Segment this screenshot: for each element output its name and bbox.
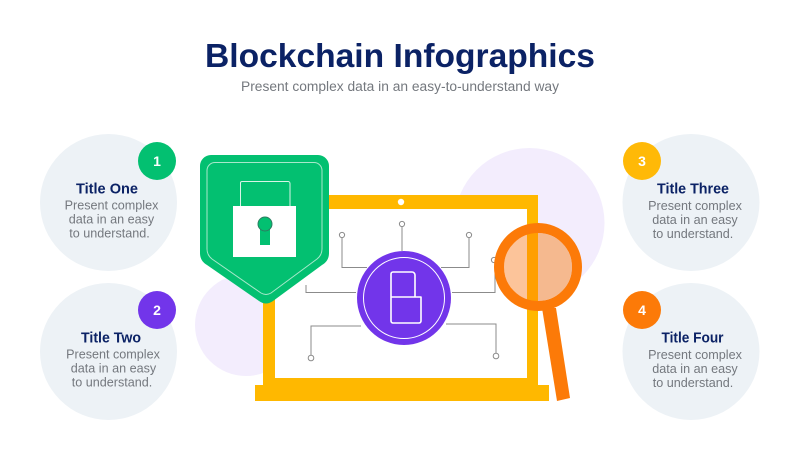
- panel: title two: Present complex: [66, 348, 161, 362]
- panel: title two: to understand.: [72, 376, 152, 390]
- panel: title four: 4: [638, 302, 646, 318]
- laptop: [255, 195, 549, 401]
- title: Blockchain Infographics: [205, 37, 595, 74]
- icon: magnifying glass: [499, 228, 577, 401]
- panel: title two: data in an easy: [71, 362, 157, 376]
- panel: title one: to understand.: [69, 226, 150, 240]
- panel: title one: 1: [153, 153, 161, 169]
- panel: title three: [622, 134, 760, 271]
- icon: blockchain coin: [357, 251, 451, 345]
- panel: title one: Present complex: [65, 198, 159, 212]
- panel: title four: to understand.: [653, 376, 733, 390]
- panel: title two: [40, 283, 177, 420]
- panel: title four: Present complex: [648, 348, 743, 362]
- panel: title one: Title One: [76, 180, 138, 198]
- panel: title two: 2: [153, 302, 161, 318]
- background circle: right: [454, 148, 604, 298]
- panel: title three: to understand.: [653, 227, 733, 241]
- panel: title three: data in an easy: [652, 213, 738, 227]
- panel: title one: data in an easy: [69, 212, 155, 226]
- subtitle: Present complex data in an easy-to-understand way: [241, 79, 559, 94]
- panel: title one: [40, 134, 177, 271]
- panel: title two: Title Two: [81, 330, 141, 346]
- icon: shield with padlock: [200, 155, 329, 304]
- panel: title three: Title Three: [657, 180, 729, 198]
- panel: title three: 3: [638, 153, 646, 169]
- panel: title four: data in an easy: [652, 362, 738, 376]
- background circle: left: [195, 274, 297, 376]
- circuit lines: [306, 221, 499, 361]
- panel: title four: [622, 283, 760, 420]
- panel: title four: Title Four: [662, 330, 724, 346]
- panel: title three: Present complex: [648, 199, 743, 213]
